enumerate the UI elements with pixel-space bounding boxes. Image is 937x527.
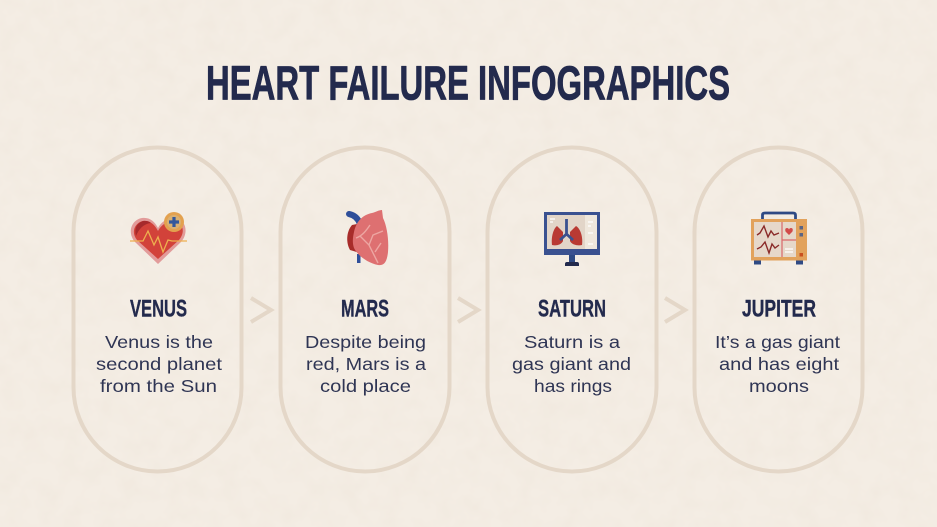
panel: Venus — [74, 148, 242, 472]
panel: Jupiter — [694, 148, 862, 472]
arrow 3 — [665, 298, 685, 322]
text: Saturn description: gas giant and — [512, 354, 631, 374]
text: Jupiter description — [715, 332, 840, 396]
icon: anatomical heart — [347, 210, 388, 265]
text: Jupiter description: It’s a gas giant — [715, 332, 840, 352]
text: Saturn description — [512, 332, 631, 396]
heading: Mars: MARS — [341, 296, 389, 322]
icon: monitor with lungs — [544, 212, 600, 266]
text: Venus description: second planet — [96, 354, 222, 374]
text: Jupiter description: and has eight — [719, 354, 839, 374]
text: Saturn description: Saturn is a — [524, 332, 620, 352]
text: Venus description: from the Sun — [100, 376, 217, 396]
text: Mars description: cold place — [320, 376, 411, 396]
panel: Mars — [280, 148, 450, 472]
text: Mars description: red, Mars is a — [306, 354, 426, 374]
text: Venus description — [96, 332, 222, 396]
text: Mars description: Despite being — [305, 332, 426, 352]
heading: Jupiter: JUPITER — [742, 296, 816, 322]
heading: Saturn: SATURN — [538, 296, 606, 322]
icon: heart with plus badge — [130, 212, 187, 264]
text: Venus description: Venus is the — [105, 332, 213, 352]
heading: Venus: VENUS — [130, 296, 187, 322]
panel: Saturn — [488, 148, 656, 472]
text: Saturn description: has rings — [534, 376, 612, 396]
text: Mars description — [305, 332, 426, 396]
text: Jupiter description: moons — [749, 376, 809, 396]
icon: medical monitor device — [751, 213, 807, 264]
arrow 2 — [458, 298, 478, 322]
arrow 1 — [251, 298, 271, 322]
